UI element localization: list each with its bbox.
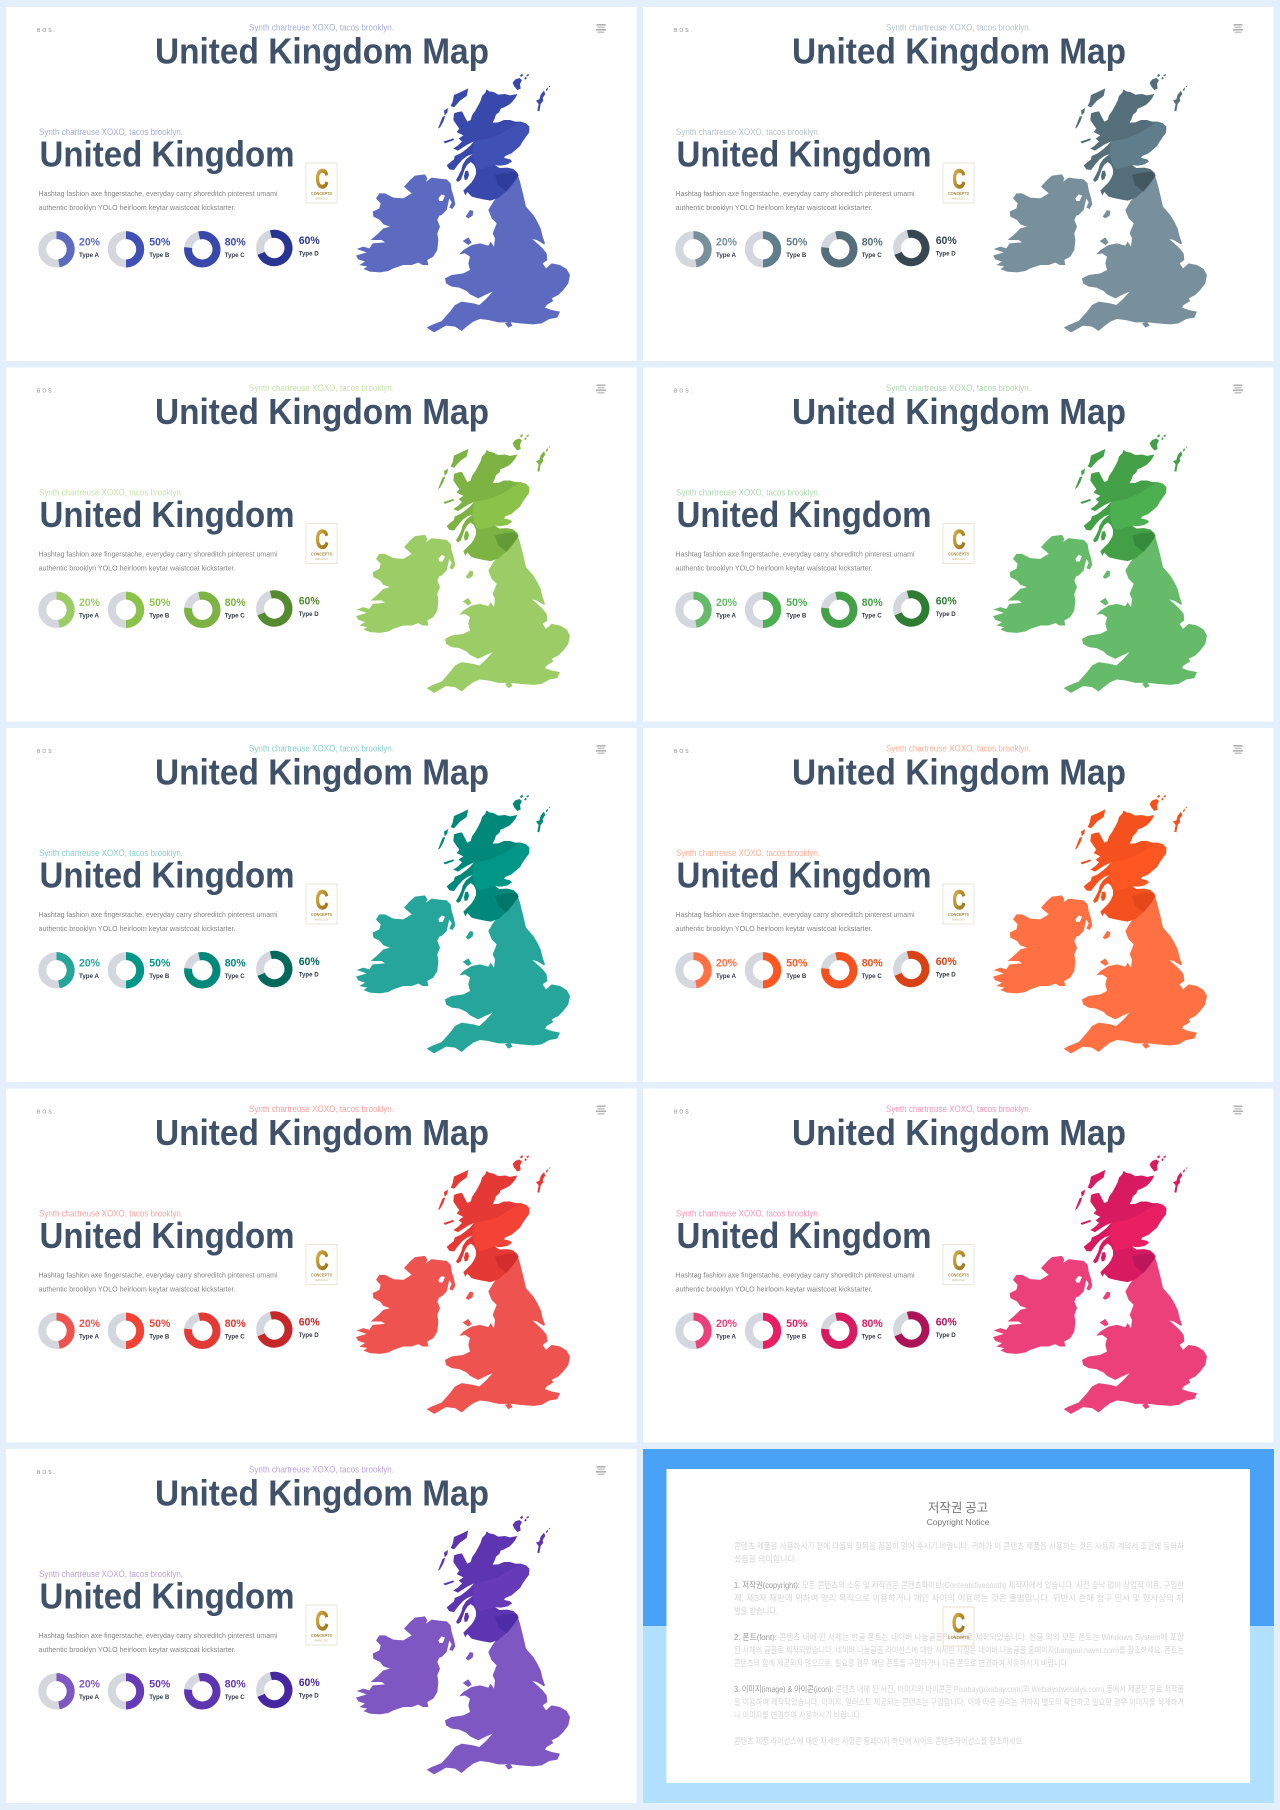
donut: Type B: 50% [786,1318,807,1330]
logo: C [316,1606,328,1636]
subheading: Synth chartreuse XOXO, tacos brooklyn. [39,127,183,137]
heading: United Kingdom [676,1215,932,1256]
logo [306,524,337,564]
heading: United Kingdom [40,854,294,896]
overline: Synth chartreuse XOXO, tacos brooklyn. [886,383,1031,393]
donut: Type C: 80% [862,236,883,248]
heading: United Kingdom [40,494,294,535]
notice body: 제, 제3자 재판매 위하여 영리 목적으로 이용하거나 개인 사이의 이용하는 것은 불법입니다. 위반시 손해 청구 민사 및 형사상의 처 [734,1593,1184,1603]
body text [38,910,278,933]
overline: Synth chartreuse XOXO, tacos brooklyn. [249,22,394,32]
overline: Synth chartreuse XOXO, tacos brooklyn. [249,1104,394,1114]
donut: Type B: Type B [149,252,170,259]
notice body: 콘텐츠 제품 라이선스에 대한 자세한 사항은 홈페이지 하단에 사이트 콘텐츠라이선스를 참조하세요. [734,1736,1024,1746]
donut: Type D [260,955,320,983]
logo: MAIN LOGO [315,1638,328,1642]
map [993,434,1207,693]
logo: C [952,524,966,554]
panel: purple map slide: BOS. [37,1470,57,1476]
notice subheading: Copyright Notice [927,1517,990,1527]
map [993,795,1207,1053]
donut: Type C: Type C [225,1694,245,1701]
donut: Type C [188,1677,246,1706]
logo: MAIN LOGO [315,1278,328,1282]
donut: Type B [112,235,170,264]
subheading: Synth chartreuse XOXO, tacos brooklyn. [676,1208,820,1218]
donut: Type D [897,955,957,983]
donut: Type A [679,956,737,984]
subheading: Synth chartreuse XOXO, tacos brooklyn. [39,1569,183,1579]
donut: Type D: 60% [299,596,320,608]
logo: CONCEPTS [311,191,332,196]
donut: Type D [260,1315,320,1344]
donut: Type A: 20% [79,1318,100,1330]
body text: authentic brooklyn YOLO heirloom keytar waistcoat kickstarter. [676,203,872,212]
donut: Type A: Type A [79,252,99,259]
donut: Type A: Type A [79,612,99,620]
logo [943,524,974,564]
logo [306,163,337,203]
donut: Type B [749,235,807,264]
donut: Type C [188,596,246,624]
logo: C [952,885,966,915]
body text: authentic brooklyn YOLO heirloom keytar waistcoat kickstarter. [676,924,872,933]
body text: Hashtag fashion axe fingerstache, everyday carry shoreditch pinterest umami [676,910,915,919]
donut: Type B [112,1317,170,1345]
overline: Synth chartreuse XOXO, tacos brooklyn. [886,1104,1031,1114]
notice body: 콘텐츠 제품을 사용하시기 전에 다음의 항목을 꼼꼼히 읽어 주시기 바랍니다. 귀하가 이 콘텐츠 제품을 사용하는 것은 사용자 계약서 조건에 동의하 [734,1541,1184,1551]
map [356,74,570,332]
logo: MAIN LOGO [315,557,328,561]
donut: Type B: Type B [786,973,807,980]
logo: CONCEPTS [311,912,332,917]
body text [676,189,915,212]
donut: Type A: Type A [716,612,736,620]
map [356,1516,570,1774]
logo: CONCEPTS [311,1633,332,1638]
logo: MAIN LOGO [952,196,965,200]
logo: C [316,164,328,194]
panel: blue-grey map slide [643,7,1274,361]
donut: Type C: Type C [862,973,882,980]
donut: Type C: 80% [862,1318,883,1330]
body text: Hashtag fashion axe fingerstache, everyday carry shoreditch pinterest umami [38,910,278,919]
donut: Type C [825,1317,883,1345]
donut: Type B: 50% [149,597,170,609]
title: United Kingdom Map [155,752,489,792]
donut: Type D: 60% [936,596,957,608]
notice body: 된 서체의 글꼴로 제작되었습니다. 네이버 나눔글꼴 라이선스에 대한 자세한 사항은 네이버 나눔글꼴 홈페이지(hangeul.naver.com)를 참조하세요. 폰트는 [734,1645,1184,1655]
panel: indigo map slide: BOS. [37,28,57,34]
donut: Type B: Type B [786,252,807,259]
notice body: 콘텐츠의 함께 제공되지 않으므로, 필요할 경우 해당 폰트를 구입하거나 다른 폰트로 변경하여 사용하시기 바랍니다. [734,1658,1069,1668]
donut: Type C: Type C [225,612,245,620]
title: United Kingdom Map [155,391,489,432]
donut: Type D: 60% [299,235,320,247]
donut: Type D [897,234,957,262]
heading: United Kingdom [676,854,932,896]
title: United Kingdom Map [155,1472,489,1514]
map [356,795,570,1053]
logo: CONCEPTS [948,191,969,196]
title: United Kingdom Map [792,391,1126,432]
donut: Type A [42,596,100,624]
panel: purple map slide [6,1449,636,1803]
heading: United Kingdom [676,134,932,174]
donut: Type D: Type D [299,1332,319,1339]
panel: green map slide [643,368,1274,722]
donut: Type A [42,1317,100,1345]
body text [676,910,915,933]
logo [943,884,974,924]
notice body: 3. 이미지(image) & 아이콘(icon): 콘텐츠 내에 된 사진, 이미지와 아이콘은 Pixabay(pixabay.com)와 Webalys(webalys.com) 등에서 제공된 무료 저작물 [734,1684,1184,1694]
body text [38,189,278,212]
logo: C [316,524,328,554]
subheading: Synth chartreuse XOXO, tacos brooklyn. [39,1208,183,1218]
logo [306,1244,337,1284]
donut: Type D: 60% [299,1677,320,1689]
panel: green map slide: BOS. [674,388,694,394]
donut: Type C: 80% [225,1318,246,1330]
donut: Type C: 80% [225,1678,246,1690]
body text: authentic brooklyn YOLO heirloom keytar waistcoat kickstarter. [676,1284,872,1294]
donut: Type C [188,1317,246,1345]
map [993,1155,1207,1414]
body text [38,1270,278,1294]
logo [306,884,337,924]
donut: Type D [897,594,957,623]
overline: Synth chartreuse XOXO, tacos brooklyn. [886,22,1031,32]
donut: Type D [260,1676,320,1704]
notice body: 1. 저작권(copyright): 모든 콘텐츠의 소유 및 저작권은 콘텐츠파이브(Contentsfivesouth) 제작자에게 있습니다. 사전 승낙 없이 상업적 이용, 구입한 [734,1580,1184,1590]
donut: Type B: Type B [149,1694,170,1701]
donut: Type B: 50% [786,236,807,248]
subheading: Synth chartreuse XOXO, tacos brooklyn. [39,488,183,498]
overline: Synth chartreuse XOXO, tacos brooklyn. [249,1464,394,1474]
donut: Type A: 20% [716,597,737,609]
logo: MAIN LOGO [315,196,328,200]
title: United Kingdom Map [155,1112,489,1153]
logo: CONCEPTS [948,1272,969,1278]
donut: Type D: Type D [299,251,319,258]
donut: Type D: 60% [936,956,957,968]
body text: Hashtag fashion axe fingerstache, everyday carry shoreditch pinterest umami [38,189,278,198]
logo: CONCEPTS [948,1635,969,1640]
donut: Type B [112,596,170,624]
donut: Type C [825,596,883,624]
donut: Type D: Type D [936,972,956,979]
donut: Type B: 50% [786,597,807,609]
map [993,74,1207,332]
donut: Type D: Type D [299,972,319,979]
logo: C [952,1246,966,1276]
body text: Hashtag fashion axe fingerstache, everyday carry shoreditch pinterest umami [38,1631,278,1640]
body text: Hashtag fashion axe fingerstache, everyday carry shoreditch pinterest umami [676,1270,915,1280]
overline: Synth chartreuse XOXO, tacos brooklyn. [886,744,1031,754]
donut: Type D: Type D [936,1332,956,1339]
donut: Type D: Type D [936,251,956,258]
donut: Type B: Type B [786,612,807,620]
donut: Type A [42,1677,100,1706]
donut: Type D [260,234,320,262]
donut: Type C: Type C [225,973,245,980]
panel: light green map slide: BOS. [37,388,57,394]
logo: C [316,885,328,915]
title: United Kingdom Map [792,752,1126,792]
logo: CONCEPTS [948,552,969,556]
subheading: Synth chartreuse XOXO, tacos brooklyn. [676,488,820,498]
panel: teal map slide [6,728,636,1082]
donut: Type D: Type D [299,611,319,618]
donut: Type C: 80% [225,597,246,609]
donut: Type C: 80% [225,236,246,248]
subheading: Synth chartreuse XOXO, tacos brooklyn. [39,848,183,858]
body text: authentic brooklyn YOLO heirloom keytar waistcoat kickstarter. [38,1284,236,1294]
donut: Type C: 80% [862,597,883,609]
donut: Type A: 20% [79,236,100,248]
logo [943,1607,974,1646]
notice body: 2. 폰트(font): 콘텐츠 내에 된 서체는 한글 폰트는 네이버 나눔글꼴의 서체로 제작되었습니다. 한글 외의 모든 폰트는 Windows System에 포함 [734,1632,1184,1642]
donut: Type C: Type C [225,252,245,259]
panel: red map slide: BOS. [37,1110,57,1116]
logo [943,1244,974,1284]
subheading: Synth chartreuse XOXO, tacos brooklyn. [676,127,820,137]
panel: pink map slide [643,1088,1274,1442]
body text [676,550,915,572]
logo: MAIN LOGO [952,918,965,922]
logo: MAIN LOGO [315,918,328,922]
panel: pink map slide: BOS. [674,1110,694,1116]
donut: Type B [112,1677,170,1706]
notice body: 을 이용하여 제작되었습니다. 이미지, 일러스트 제공되는 콘텐츠는 구입합니다. 이에 따른 권리는 귀하지 별도의 확인하고 필요할 경우 이미지를 삭제하거 [734,1697,1184,1707]
donut: Type D [260,594,320,623]
panel: blue-grey map slide: BOS. [674,28,694,34]
donut: Type B [749,1317,807,1345]
heading: United Kingdom [40,1576,294,1616]
notice body: 벌을 받습니다. [734,1606,778,1616]
heading: United Kingdom [40,134,294,174]
notice body: 나 이미지를 변경하여 사용하시기 바랍니다. [734,1710,862,1720]
donut: Type B: Type B [149,1334,170,1340]
body text: Hashtag fashion axe fingerstache, everyday carry shoreditch pinterest umami [676,189,915,198]
donut: Type A: Type A [79,1334,99,1340]
donut: Type A: 20% [79,597,100,609]
logo [306,1605,337,1645]
donut: Type A: Type A [716,252,736,259]
donut: Type D: 60% [936,235,957,247]
panel: indigo map slide [6,7,636,361]
donut: Type B: 50% [149,1318,170,1330]
donut: Type A [42,235,100,264]
logo: CONCEPTS [311,552,332,556]
donut: Type C: Type C [862,252,882,259]
donut: Type B: 50% [786,957,807,969]
donut: Type C: 80% [862,957,883,969]
logo [943,163,974,203]
panel: orange map slide: BOS. [674,749,694,755]
notice body [734,1541,1184,1746]
donut: Type A: 20% [716,1318,737,1330]
donut: Type A: 20% [716,236,737,248]
donut: Type A [42,956,100,984]
donut: Type A: Type A [716,973,736,980]
body text [38,1631,278,1654]
donut: Type D [897,1315,957,1344]
donut: Type B: 50% [149,236,170,248]
body text: Hashtag fashion axe fingerstache, everyday carry shoreditch pinterest umami [38,1270,278,1280]
donut: Type B [749,956,807,984]
title: United Kingdom Map [792,30,1126,72]
body text: authentic brooklyn YOLO heirloom keytar waistcoat kickstarter. [676,564,872,572]
body text: authentic brooklyn YOLO heirloom keytar waistcoat kickstarter. [38,924,236,933]
body text: Hashtag fashion axe fingerstache, everyday carry shoreditch pinterest umami [38,550,278,558]
donut: Type B [749,596,807,624]
donut: Type B [112,956,170,984]
logo: C [952,164,966,194]
donut: Type C [825,956,883,984]
logo: MAIN LOGO [952,1278,965,1282]
donut: Type C: Type C [225,1334,245,1340]
overline: Synth chartreuse XOXO, tacos brooklyn. [249,744,394,754]
body text: authentic brooklyn YOLO heirloom keytar waistcoat kickstarter. [38,1645,236,1654]
donut: Type C: Type C [862,1334,882,1340]
body text: Hashtag fashion axe fingerstache, everyday carry shoreditch pinterest umami [676,550,915,558]
donut: Type D: Type D [299,1693,319,1700]
donut: Type A: Type A [79,1694,99,1701]
donut: Type A: 20% [79,1678,100,1690]
heading: United Kingdom [676,494,932,535]
donut: Type B: Type B [786,1334,807,1340]
donut: Type C [825,235,883,264]
panel: teal map slide: BOS. [37,749,57,755]
donut: Type C: Type C [862,612,882,620]
donut: Type C [188,235,246,264]
donut: Type A: 20% [79,957,100,969]
donut: Type D: 60% [299,1316,320,1328]
donut: Type C: 80% [225,957,246,969]
donut: Type A: Type A [716,1334,736,1340]
body text [676,1270,915,1294]
overline: Synth chartreuse XOXO, tacos brooklyn. [249,383,394,393]
logo: CONCEPTS [311,1272,332,1278]
body text [38,550,278,572]
panel: copyright notice [643,1449,1274,1803]
body text: authentic brooklyn YOLO heirloom keytar waistcoat kickstarter. [38,203,236,212]
donut: Type B: Type B [149,612,170,620]
donut: Type A: Type A [79,973,99,980]
logo: C [952,1608,965,1638]
logo: C [316,1246,328,1276]
donut: Type D: 60% [299,956,320,968]
title: United Kingdom Map [792,1112,1126,1153]
donut: Type A [679,596,737,624]
map [356,434,570,693]
donut: Type A: 20% [716,957,737,969]
title: United Kingdom Map [155,30,489,72]
donut: Type D: Type D [936,611,956,618]
panel: orange map slide [643,728,1274,1082]
donut: Type B: 50% [149,957,170,969]
subheading: Synth chartreuse XOXO, tacos brooklyn. [676,848,820,858]
donut: Type B: 50% [149,1678,170,1690]
map [356,1155,570,1414]
heading: United Kingdom [40,1215,294,1256]
notice body: 셨음을 의미합니다. [734,1554,797,1564]
logo: MAIN LOGO [952,557,965,561]
donut: Type A [679,1317,737,1345]
donut: Type A [679,235,737,264]
panel: light green map slide [6,368,636,722]
notice heading: 저작권 공고 [928,1497,988,1516]
body text: authentic brooklyn YOLO heirloom keytar waistcoat kickstarter. [38,564,236,572]
donut: Type D: 60% [936,1316,957,1328]
panel: red map slide [6,1088,636,1442]
donut: Type B: Type B [149,973,170,980]
donut: Type C [188,956,246,984]
logo: CONCEPTS [948,912,969,917]
